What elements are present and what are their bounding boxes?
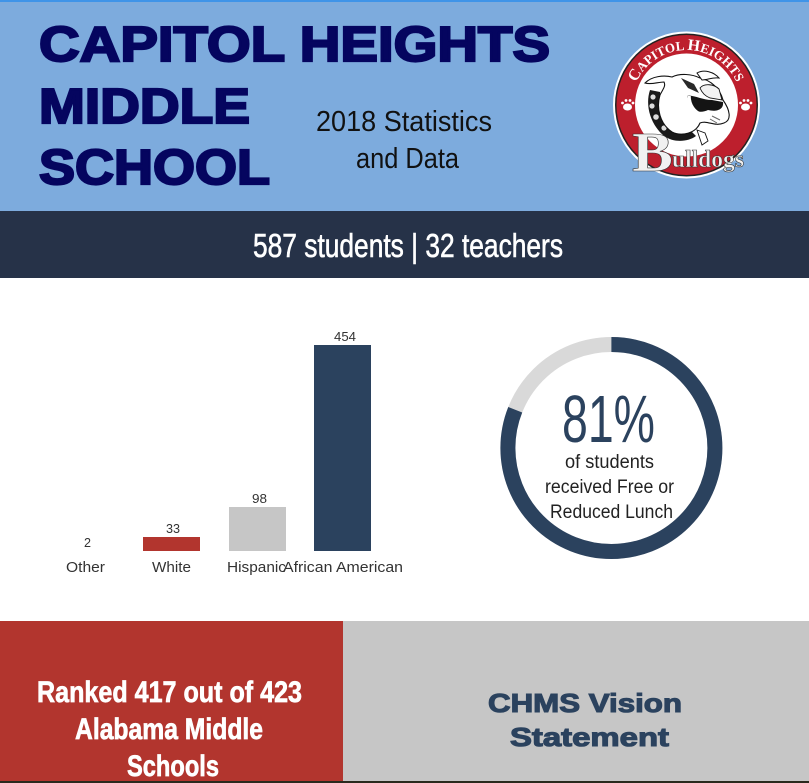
subtitle: 2018 Statistics xyxy=(316,106,492,138)
panel: vision statement: CHMS Vision xyxy=(488,688,682,718)
panel: vision statement xyxy=(343,621,809,781)
category labels: White xyxy=(152,560,191,576)
donut caption: received Free or xyxy=(545,477,675,498)
panel: ranking: Alabama Middle xyxy=(75,713,263,746)
value labels: 2 xyxy=(84,536,91,550)
category labels: Hispanic xyxy=(227,560,286,576)
donut chart: 81 percent free or reduced lunch xyxy=(508,344,715,552)
value labels: 33 xyxy=(166,522,180,536)
subtitle: and Data xyxy=(356,143,460,175)
bar chart xyxy=(66,330,403,576)
title: CAPITOL HEIGHTS xyxy=(39,18,550,72)
header panel xyxy=(0,0,809,211)
value labels: 98 xyxy=(252,492,267,506)
icon: bulldogs logo xyxy=(613,32,760,184)
category labels: African American xyxy=(283,560,403,576)
title xyxy=(39,18,550,195)
logo wordmark: B xyxy=(632,122,673,184)
stats band: 587 students | 32 teachers xyxy=(253,227,563,264)
bars xyxy=(143,345,371,551)
stats band xyxy=(0,211,809,278)
percentage: 81% xyxy=(562,382,655,457)
category labels xyxy=(66,560,403,576)
bulldog xyxy=(648,90,696,141)
logo wordmark: ulldogs xyxy=(672,147,744,173)
donut caption: Reduced Lunch xyxy=(550,502,673,523)
value labels: 454 xyxy=(334,330,356,344)
category labels: Other xyxy=(66,560,105,576)
donut caption xyxy=(545,452,675,523)
logo wordmark xyxy=(632,122,744,184)
panel: vision statement: Statement xyxy=(510,722,669,752)
title: MIDDLE xyxy=(39,80,250,134)
panel: ranking: Schools xyxy=(127,750,219,783)
paws xyxy=(621,99,752,110)
donut caption: of students xyxy=(565,452,654,473)
panel: ranking xyxy=(0,621,343,783)
icon: bulldogs logo: CAPITOL HEIGHTS xyxy=(629,39,744,82)
subtitle xyxy=(316,106,492,175)
value labels xyxy=(84,330,356,550)
title: SCHOOL xyxy=(39,141,270,195)
panel: ranking: Ranked 417 out of 423 xyxy=(37,676,302,709)
